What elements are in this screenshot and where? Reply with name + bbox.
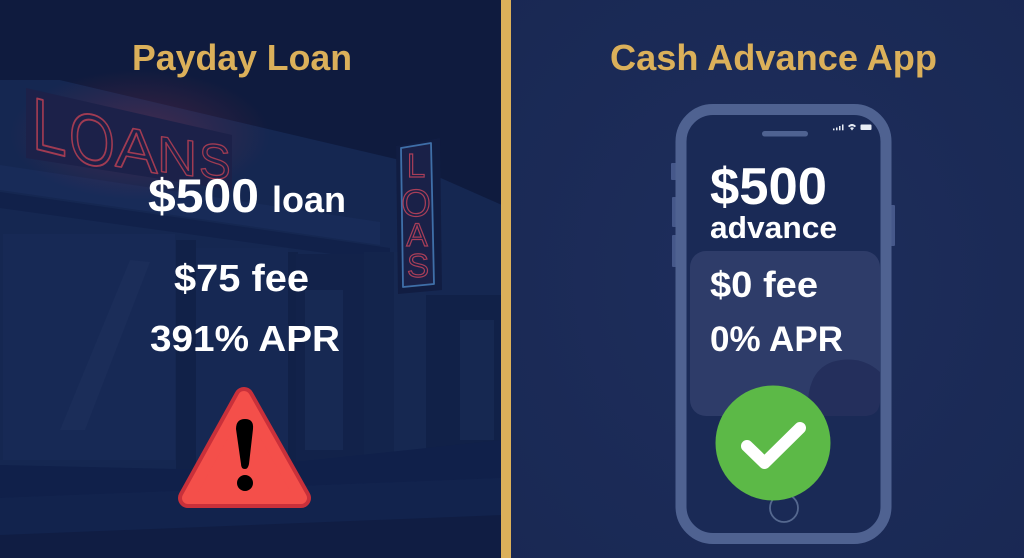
card <box>690 251 880 416</box>
neon sign: LOANS <box>26 81 232 191</box>
stat: $500 loan: $500 <box>148 169 259 222</box>
stat: $0 fee: $0 fee <box>710 264 818 305</box>
neon sign: LOANS: O <box>69 96 115 186</box>
side buttons <box>671 163 895 267</box>
neon sign: LOANS: L <box>32 81 67 173</box>
neon sign: vertical LOANS: O <box>401 183 431 225</box>
stat: $75 fee: $75 fee <box>174 258 309 300</box>
neon sign: LOANS: N <box>157 126 197 188</box>
phone body <box>681 110 886 538</box>
storefront background <box>0 0 502 558</box>
icon: warning triangle <box>188 397 301 498</box>
panel: cash advance app <box>511 0 1024 558</box>
stat: 391% APR: 391% APR <box>150 318 340 359</box>
icon: green check <box>716 386 830 500</box>
neon sign: vertical LOANS: S <box>407 247 429 284</box>
neon sign: LOANS: S <box>199 133 231 191</box>
neon sign: vertical LOANS: L <box>407 147 425 184</box>
phone <box>671 110 895 538</box>
panel: payday loan <box>0 0 502 558</box>
speaker <box>762 131 808 136</box>
stat: $500 loan: loan <box>272 179 346 220</box>
neon glow <box>10 70 270 200</box>
stat: $500 advance: advance <box>710 210 837 245</box>
neon sign: LOANS: A <box>115 114 158 187</box>
heading: payday loan: Payday Loan <box>132 37 352 78</box>
stat: $500 loan <box>148 169 346 222</box>
status icons <box>833 124 872 130</box>
home button <box>770 494 798 522</box>
center divider <box>501 0 511 558</box>
neon sign: vertical LOANS: A <box>406 217 428 253</box>
neon sign: vertical LOANS <box>396 138 442 294</box>
stat: $500 advance: $500 <box>710 158 827 216</box>
stat: 0% APR: 0% APR <box>710 320 843 359</box>
card shadow <box>808 360 880 416</box>
stat: $500 advance <box>710 158 837 245</box>
heading: cash advance app: Cash Advance App <box>610 37 937 78</box>
